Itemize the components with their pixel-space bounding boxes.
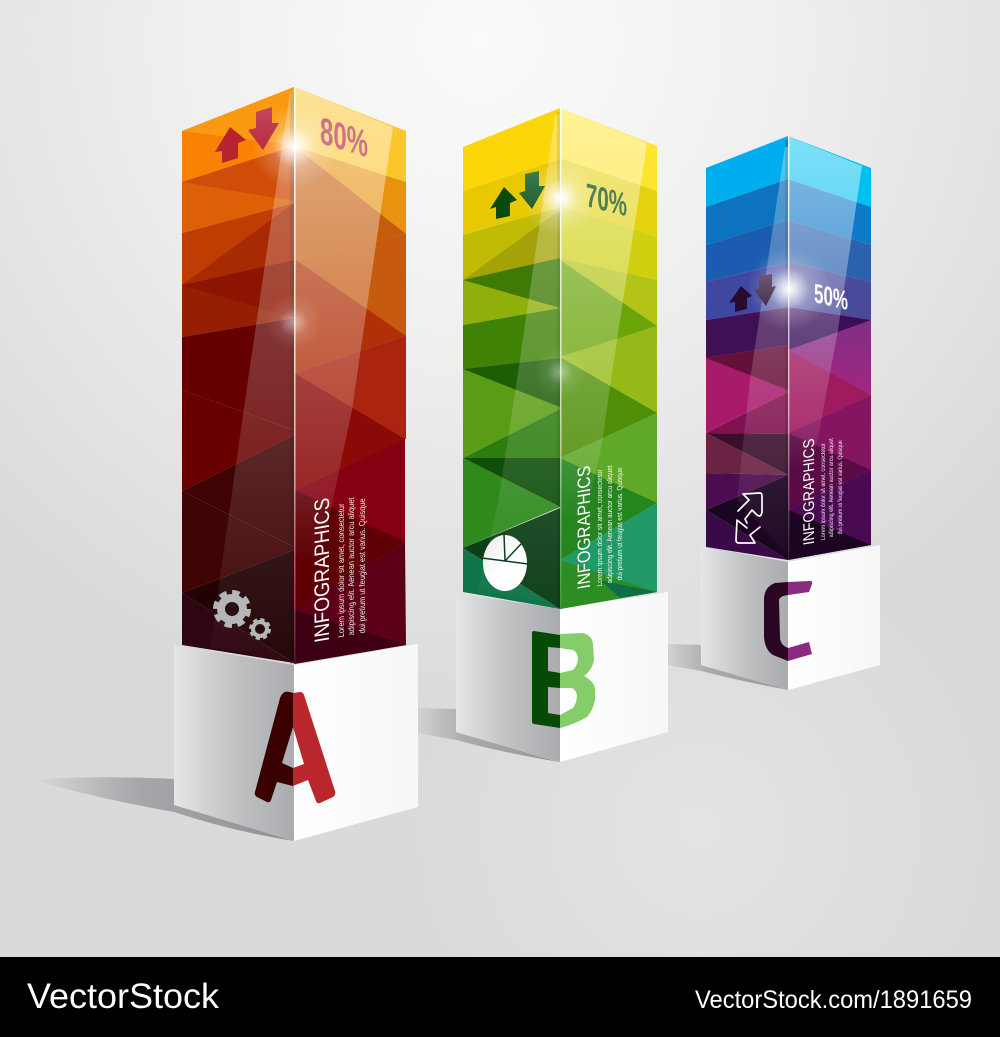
text B body: dui pretium ut feugiat est varius. Quisque bbox=[615, 467, 624, 581]
percent 50: 50% bbox=[814, 277, 848, 316]
column B group bbox=[456, 108, 668, 762]
footer url text: VectorStock.com/1891659 bbox=[695, 986, 972, 1014]
flare A bbox=[252, 105, 336, 189]
icon: pie chart bbox=[482, 534, 528, 591]
flare B bbox=[522, 160, 598, 236]
percent 80: 80% bbox=[320, 110, 368, 166]
arrows A bbox=[215, 107, 279, 163]
text A heading: INFOGRAPHICS bbox=[311, 496, 334, 644]
footer logo text: VectorStock bbox=[27, 977, 220, 1016]
text B heading: INFOGRAPHICS bbox=[574, 464, 594, 591]
base A bbox=[174, 644, 418, 841]
text C body: adipiscing elit. Aenean auctor arcu aliquet bbox=[828, 437, 835, 538]
column A right face bbox=[294, 87, 406, 664]
text C body bbox=[820, 437, 844, 541]
text B body: Lorem ipsum dolor sit amet, consectetur bbox=[595, 468, 604, 587]
icon: exchange arrows bbox=[736, 493, 762, 543]
letter B bbox=[532, 631, 595, 728]
floor shadow A bbox=[33, 777, 294, 841]
column B right face bbox=[560, 108, 657, 609]
column C left face bbox=[706, 136, 788, 560]
column A left face bbox=[182, 87, 294, 664]
flare C bbox=[747, 247, 831, 331]
flare A lower bbox=[266, 294, 322, 350]
text A body: dui pretium ut feugiat est varius. Quisque bbox=[357, 497, 367, 634]
floor shadow B bbox=[418, 708, 559, 762]
text A body bbox=[336, 496, 367, 638]
arrows B bbox=[490, 171, 545, 219]
icon: gears bbox=[216, 592, 270, 638]
percent 70: 70% bbox=[586, 177, 627, 224]
text C body: dui pretium ut feugiat est varius. Quisque bbox=[837, 439, 844, 535]
column C right face bbox=[788, 136, 871, 560]
text C heading: INFOGRAPHICS bbox=[801, 437, 818, 546]
text A body: adipiscing elit. Aenean auctor arcu aliquet bbox=[346, 496, 356, 636]
letter C bbox=[764, 581, 812, 661]
text B body bbox=[595, 464, 624, 587]
column C group bbox=[700, 136, 880, 690]
base C bbox=[700, 545, 880, 690]
column A group bbox=[174, 87, 418, 841]
arrows C bbox=[729, 274, 776, 312]
column B left face bbox=[463, 108, 560, 609]
footer bar bbox=[0, 957, 1000, 1037]
text C body: Lorem ipsum dolor sit amet, consectetur bbox=[820, 443, 827, 541]
floor shadow C bbox=[668, 644, 788, 690]
letter A bbox=[255, 692, 335, 803]
base B bbox=[456, 592, 668, 762]
text A body: Lorem ipsum dolor sit amet, consectetur bbox=[336, 503, 346, 638]
text B body: adipiscing elit. Aenean auctor arcu aliquet bbox=[605, 464, 614, 584]
flare B lower bbox=[534, 346, 586, 398]
